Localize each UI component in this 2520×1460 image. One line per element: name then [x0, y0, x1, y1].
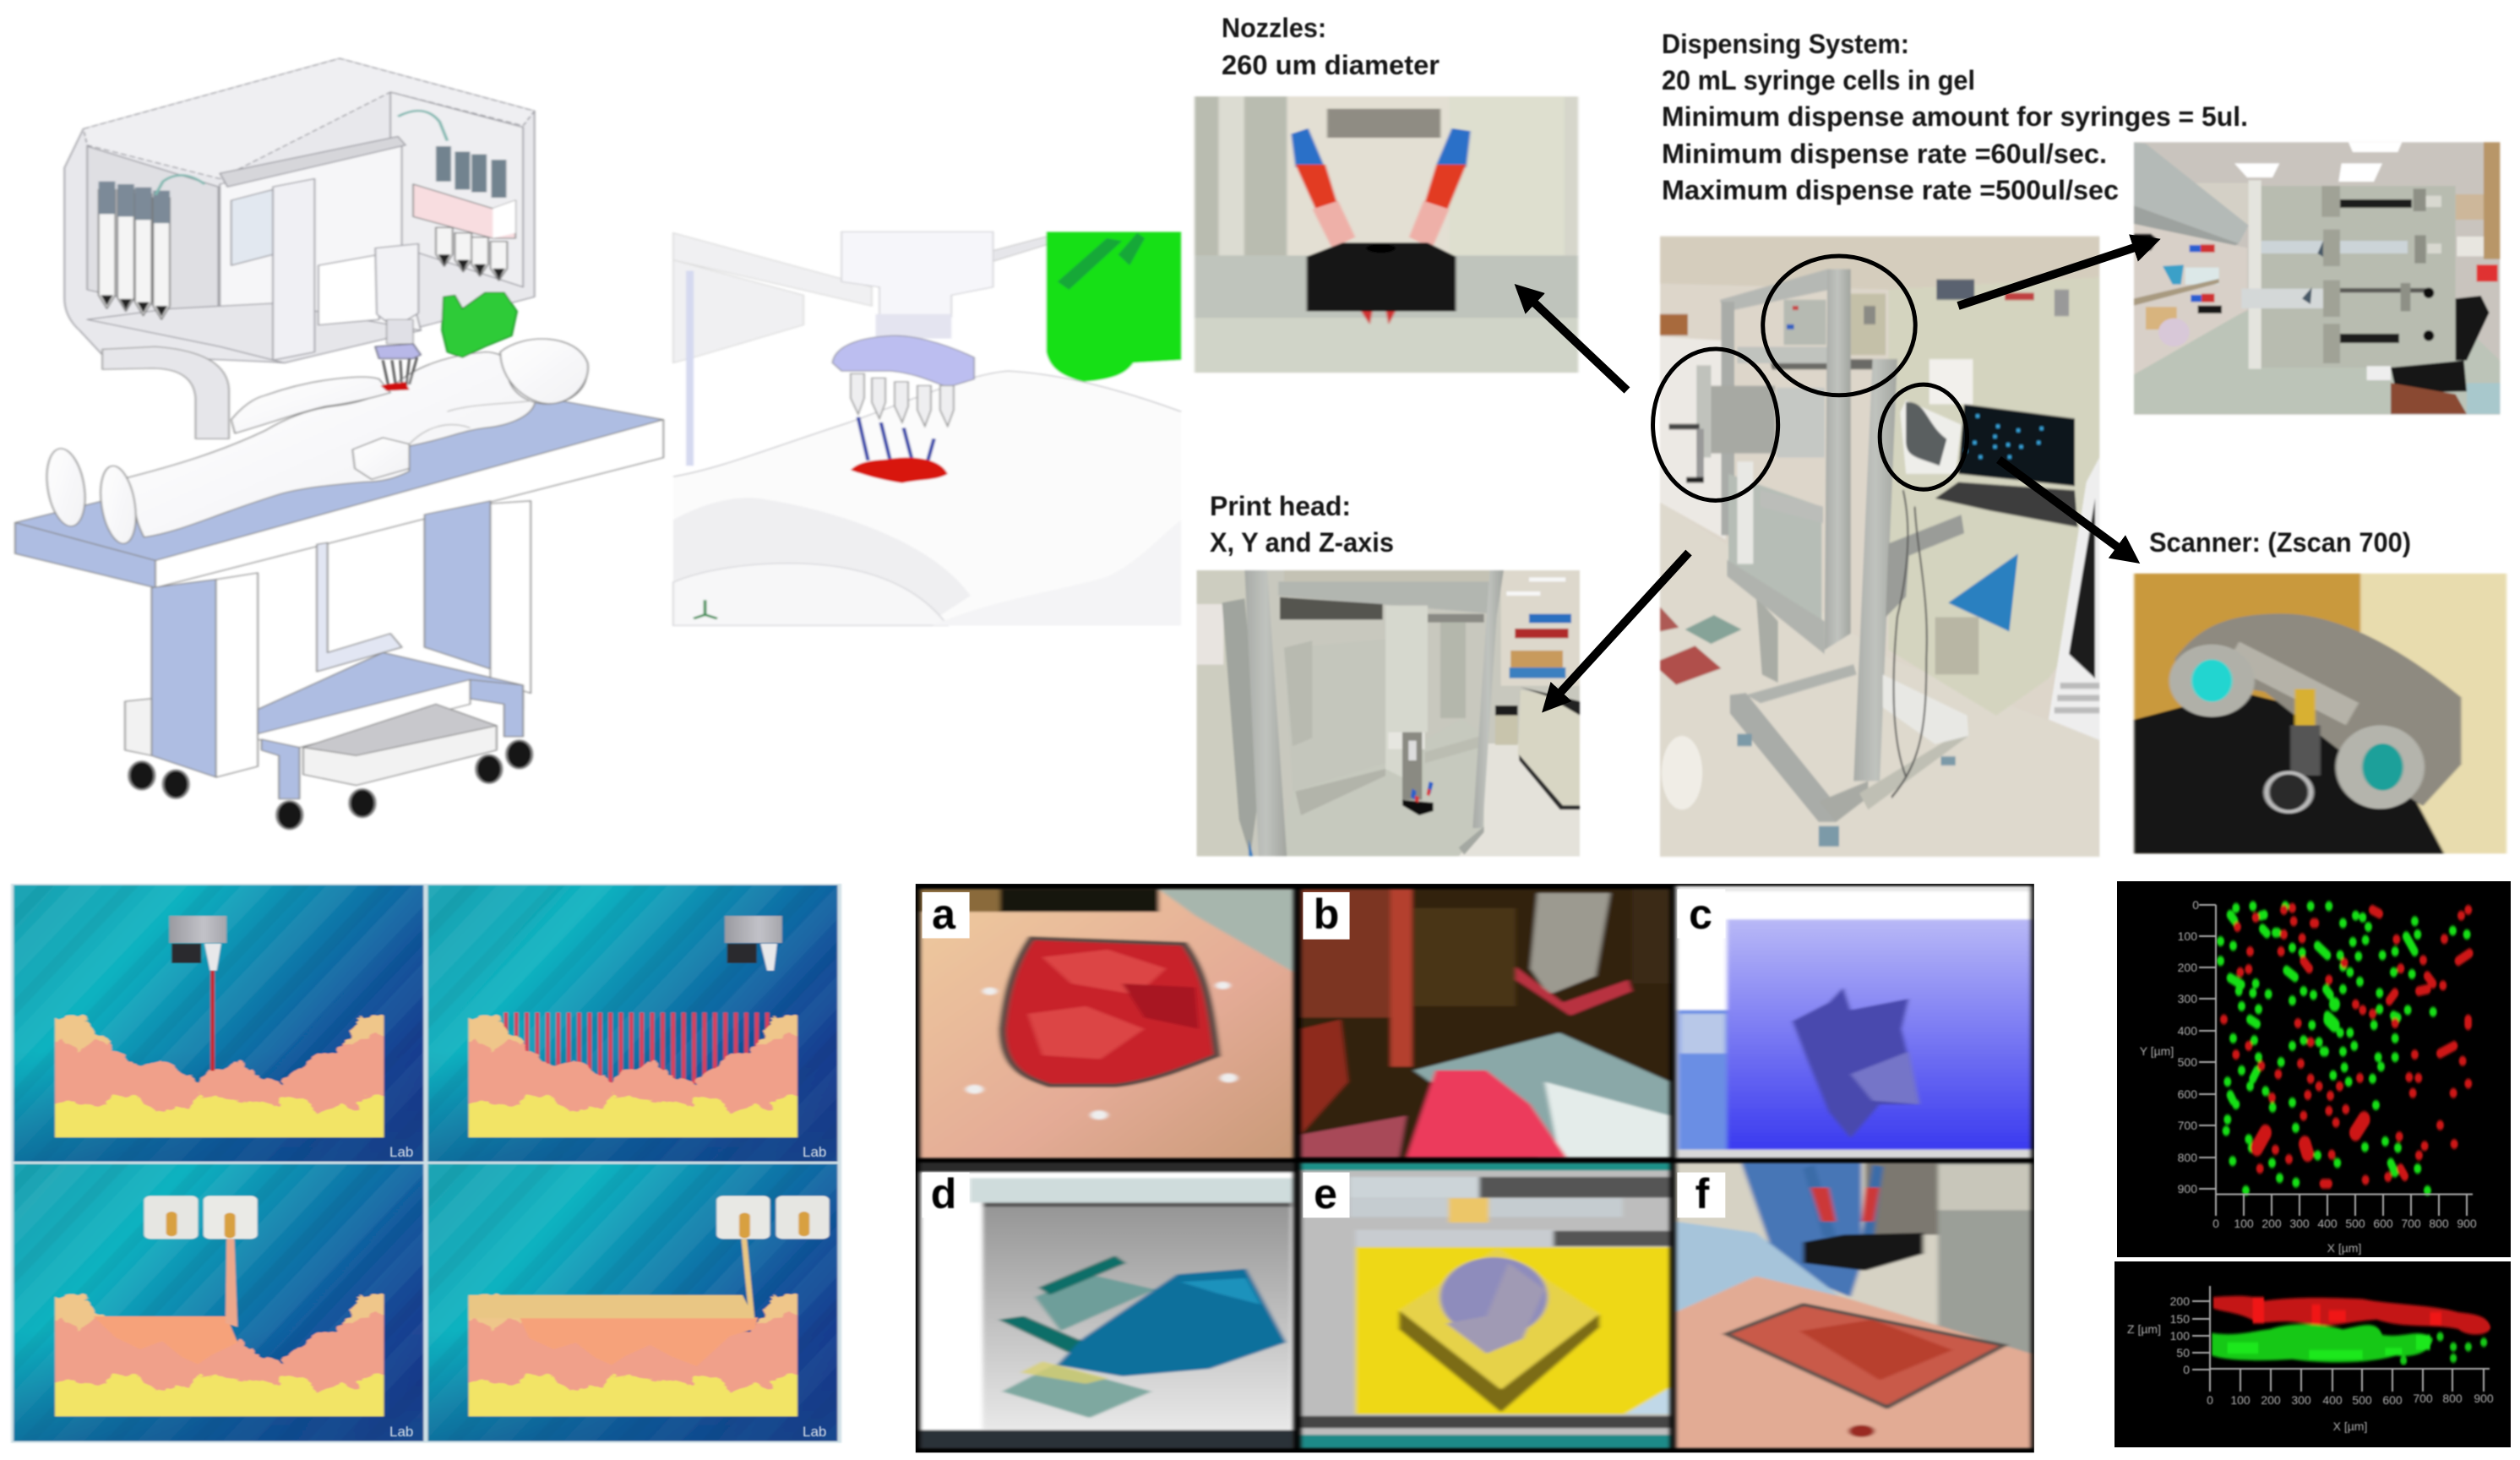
table legs — [125, 501, 531, 777]
nozzles caption: 260 um diameter — [1222, 50, 1440, 80]
photo d: mesh model screen — [920, 1163, 1293, 1448]
diagram: laser scan complete — [427, 885, 837, 1162]
tick labels: 500 — [2345, 1217, 2365, 1230]
green model — [442, 292, 517, 357]
support arm — [102, 346, 229, 439]
tick labels: 800 — [2442, 1392, 2463, 1405]
tick labels: 400 — [2322, 1393, 2343, 1407]
panel letters: e — [1314, 1170, 1337, 1218]
watermark labels: Lab — [803, 1424, 826, 1440]
tick labels: 900 — [2178, 1182, 2197, 1196]
photo: print head — [1197, 570, 1580, 856]
step stool — [258, 652, 523, 798]
tick labels: 600 — [2382, 1393, 2403, 1407]
diagram: laser scan start — [14, 885, 423, 1162]
nozzles caption — [1222, 13, 1440, 80]
body surfaces — [673, 371, 1181, 625]
left syringe bank — [99, 182, 170, 319]
photo f: bioprinting on wound — [1676, 1163, 2031, 1448]
tick labels: 100 — [2178, 929, 2197, 943]
tick labels: 100 — [2170, 1329, 2190, 1343]
dispensing system specification text: 20 mL syringe cells in gel — [1662, 65, 1975, 95]
tick labels: 500 — [2178, 1055, 2197, 1069]
panel letters — [931, 891, 1712, 1218]
photo e: thickness map screen — [1301, 1163, 1670, 1448]
red printed wound — [851, 457, 948, 483]
dispensing system specification text: Maximum dispense rate =500ul/sec — [1662, 175, 2119, 205]
dispensing system specification text: Minimum dispense amount for syringes = 5ul. — [1662, 101, 2248, 132]
panel letters: c — [1689, 891, 1712, 938]
tick labels: 300 — [2291, 1393, 2311, 1407]
tick labels: X [µm] — [2333, 1419, 2367, 1433]
photo: nozzles — [1195, 96, 1578, 373]
tick labels: 300 — [2178, 992, 2197, 1005]
tick labels: 800 — [2178, 1151, 2197, 1164]
right syringe bank — [413, 146, 515, 281]
watermark labels: Lab — [389, 1424, 413, 1440]
arrow: system to print head — [1548, 553, 1689, 706]
tick labels: 0 — [2207, 1393, 2213, 1407]
tick labels: 200 — [2170, 1294, 2190, 1308]
tick labels: Z [µm] — [2127, 1322, 2161, 1336]
tick labels: 200 — [2261, 1217, 2282, 1230]
photo a: excised wound — [920, 889, 1293, 1158]
nozzles caption: Nozzles: — [1222, 13, 1326, 43]
photo b: scanning wound — [1301, 889, 1670, 1158]
label tabs — [923, 889, 1725, 1218]
central post — [317, 542, 402, 672]
tick labels: 100 — [2230, 1393, 2251, 1407]
panel: printing process diagrams — [11, 884, 841, 1443]
tick labels: 700 — [2413, 1392, 2433, 1405]
tick labels: 0 — [2192, 898, 2199, 912]
fluorescent cells — [2220, 906, 2469, 1190]
nozzles — [851, 373, 954, 426]
photo: scanner — [2134, 574, 2506, 853]
photo c: raw scan screen — [1676, 886, 2031, 1158]
tick labels: 50 — [2176, 1346, 2190, 1359]
casters — [129, 740, 532, 829]
watermark labels: Lab — [803, 1144, 826, 1160]
panel letters: f — [1695, 1170, 1710, 1218]
print head caption: Print head: — [1210, 491, 1351, 521]
confocal top view chart — [2117, 881, 2511, 1257]
tick labels: 100 — [2234, 1217, 2254, 1230]
panel letters: a — [932, 891, 956, 938]
lavender print head — [832, 335, 974, 387]
photo: dispensing assembly — [2134, 142, 2500, 415]
tick labels: 900 — [2474, 1392, 2494, 1405]
print head and nozzles — [375, 319, 421, 391]
tick labels: 400 — [2178, 1024, 2197, 1038]
actuator column — [841, 232, 993, 317]
tick labels: 600 — [2373, 1217, 2393, 1230]
tick labels: 200 — [2261, 1393, 2281, 1407]
highlight circles — [1653, 256, 1968, 500]
panel: a-f treatment sequence — [916, 884, 2034, 1452]
arrow: system to dispensing assembly — [1958, 242, 2153, 306]
tubing — [155, 111, 447, 195]
watermark labels: Lab — [389, 1144, 413, 1160]
cell layers — [2212, 1296, 2490, 1363]
tick labels — [2140, 898, 2477, 1255]
printer housing — [64, 58, 535, 362]
arrow: system to nozzles — [1521, 290, 1627, 390]
dispensing system specification text: Dispensing System: — [1662, 29, 1909, 59]
tick labels: 200 — [2178, 961, 2197, 974]
diagram: inkjet deposition complete — [427, 1164, 837, 1441]
frame bar — [673, 233, 872, 362]
tick labels: 0 — [2212, 1217, 2219, 1230]
photo: complete print system — [1653, 237, 2099, 857]
tick labels: X [µm] — [2327, 1241, 2361, 1255]
filaments — [858, 417, 934, 466]
panel letters: b — [1314, 891, 1339, 938]
table top — [15, 395, 663, 587]
tick labels: 500 — [2352, 1393, 2372, 1407]
tick labels: 150 — [2170, 1312, 2190, 1326]
tick labels: 0 — [2183, 1363, 2190, 1376]
axis triad — [694, 600, 717, 618]
tick labels — [2127, 1294, 2494, 1433]
diagram: inkjet deposition start — [14, 1164, 423, 1441]
scanner caption: Scanner: (Zscan 700) — [2149, 527, 2411, 558]
patient body — [42, 339, 588, 545]
print head caption: X, Y and Z-axis — [1210, 527, 1394, 558]
print head caption — [1210, 491, 1394, 558]
tick labels: 400 — [2317, 1217, 2338, 1230]
panel letters: d — [931, 1170, 956, 1218]
arrow: system to scanner — [1999, 460, 2133, 558]
watermark labels — [389, 1144, 826, 1440]
dispensing system specification text: Minimum dispense rate =60ul/sec. — [1662, 139, 2107, 169]
confocal side view chart — [2115, 1261, 2511, 1447]
tick labels: 300 — [2289, 1217, 2310, 1230]
axes — [2192, 1286, 2490, 1392]
CAD illustration: bioprinter over patient on table — [15, 58, 663, 829]
axes — [2199, 905, 2473, 1216]
dispensing system specification text — [1662, 29, 2248, 205]
tick labels: Y [µm] — [2140, 1044, 2174, 1058]
tick labels: 800 — [2429, 1217, 2449, 1230]
green model close-up — [1046, 232, 1181, 382]
tick labels: 600 — [2178, 1087, 2197, 1101]
tick labels: 700 — [2178, 1119, 2197, 1132]
tick labels: 700 — [2401, 1217, 2421, 1230]
CAD close-up of print head over wound — [673, 232, 1181, 625]
tick labels: 900 — [2457, 1217, 2477, 1230]
